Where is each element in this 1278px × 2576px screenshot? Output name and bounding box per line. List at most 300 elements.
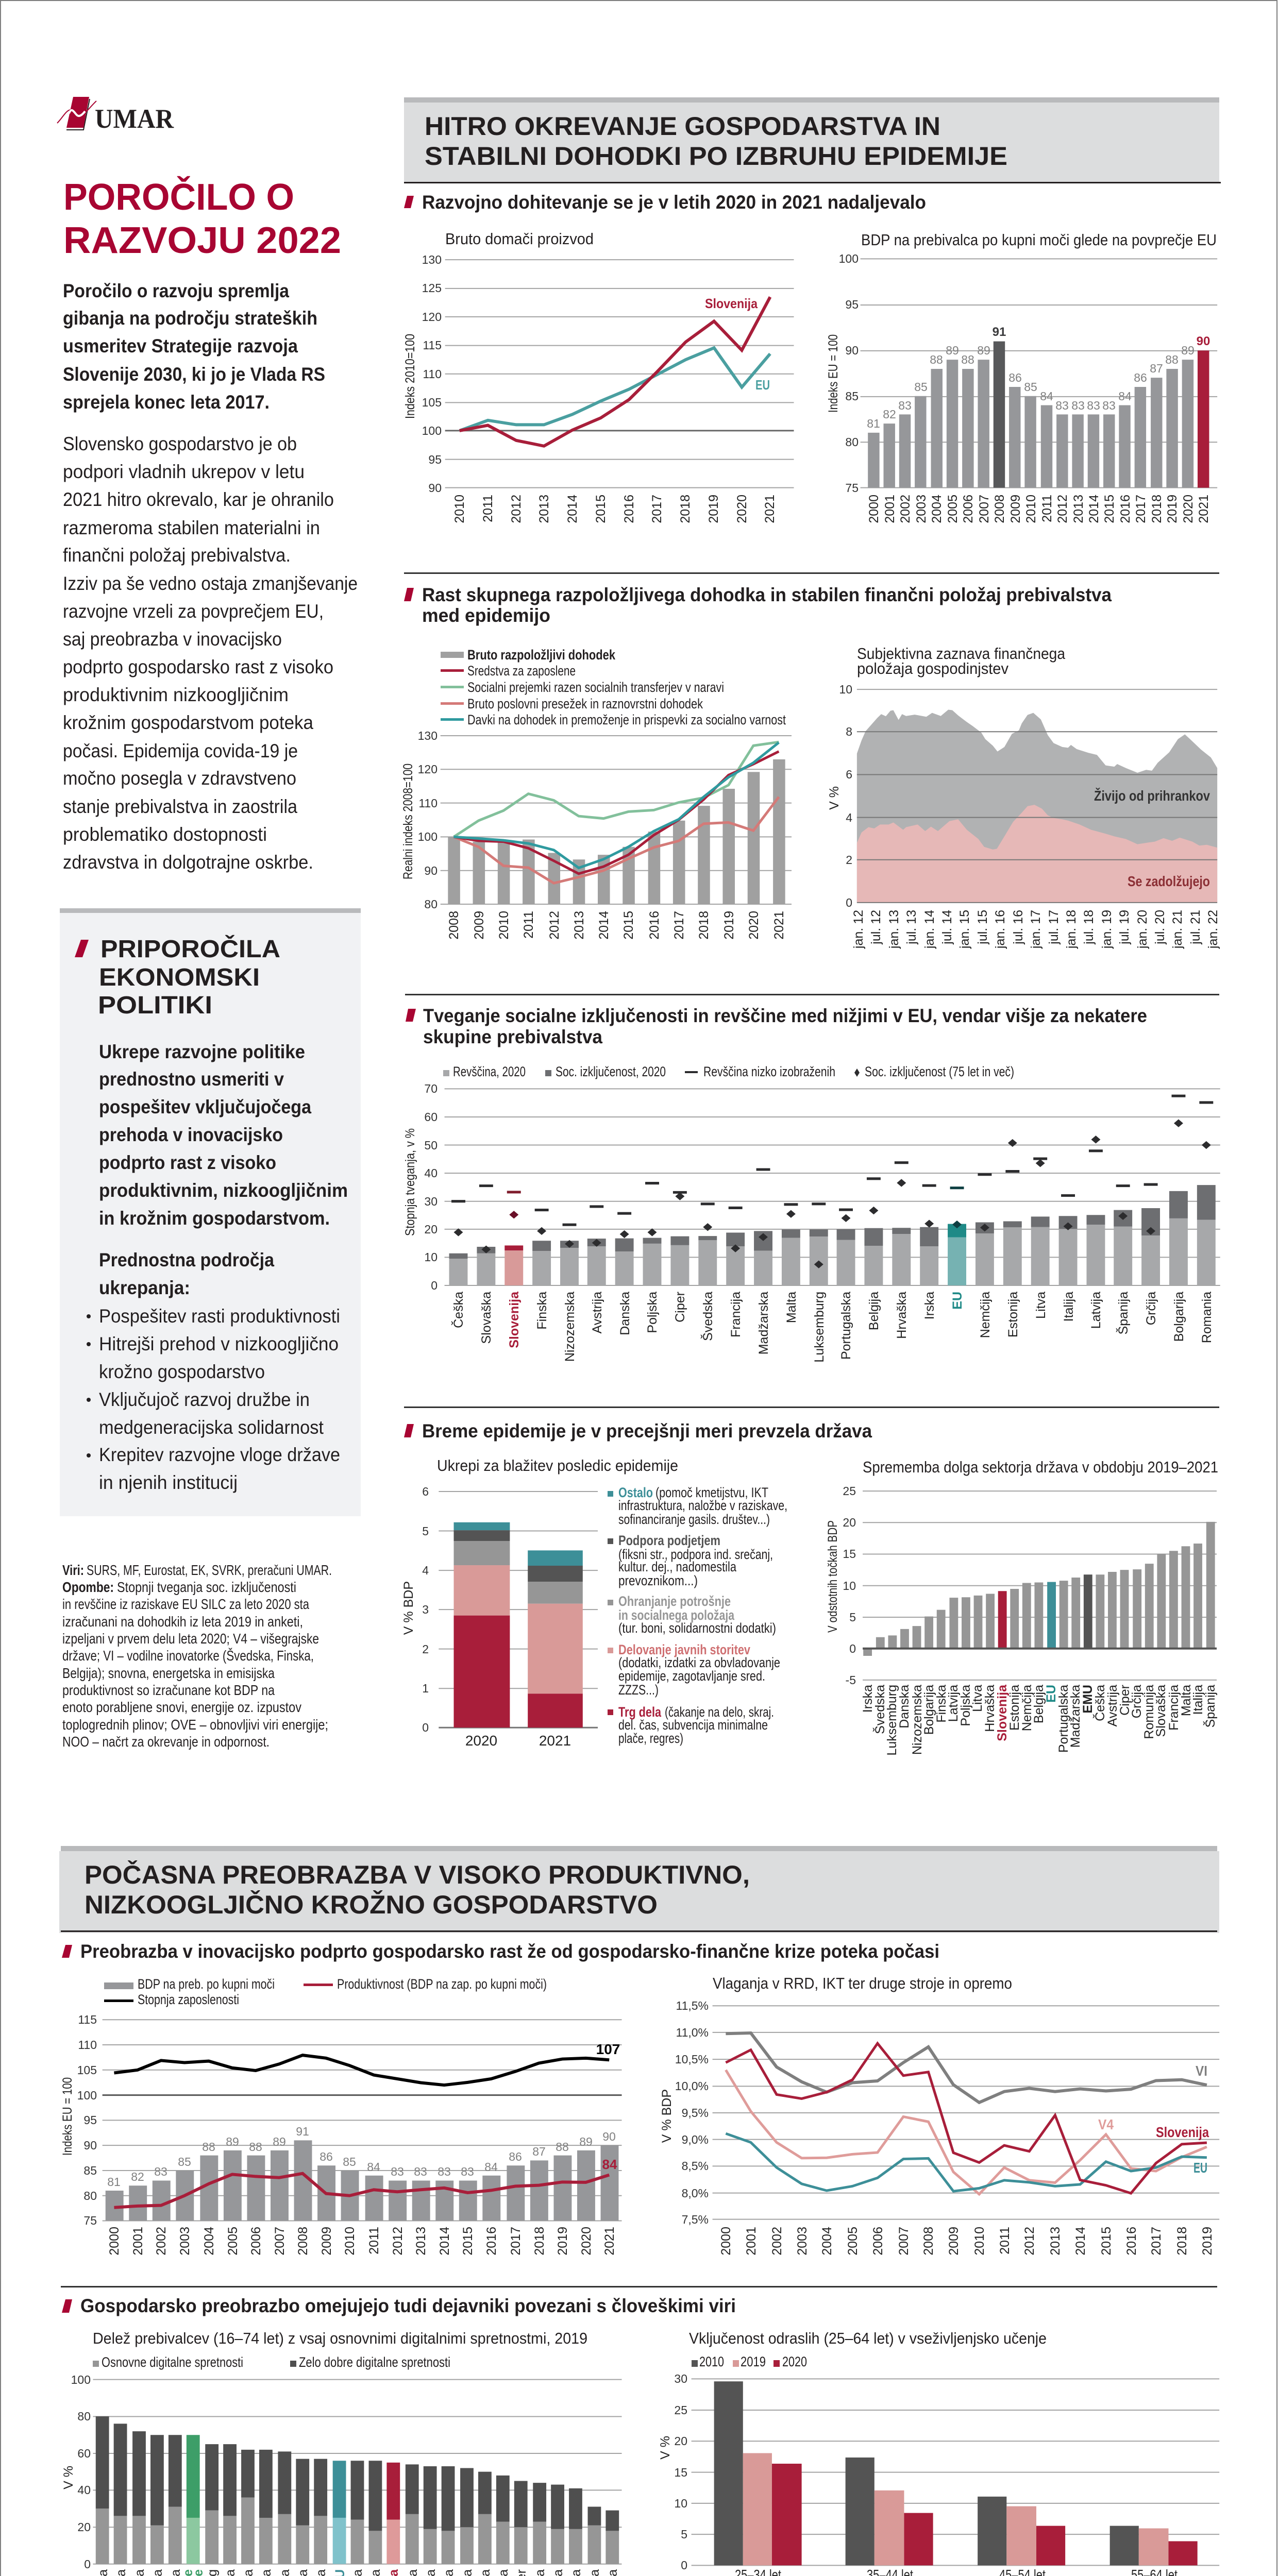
- legend: [692, 2354, 807, 2369]
- text block: sources and notes: produktivnost so izračunane kot BDP na: [62, 1682, 275, 1698]
- icon: heading marker: [75, 940, 89, 957]
- text block: body: finančni položaj prebivalstva.: [63, 545, 291, 566]
- chart: household income: 2019: [722, 911, 736, 940]
- chart: subjective financial position: jan. 20: [1135, 910, 1150, 949]
- chart: GDP line chart: 2018: [678, 495, 693, 523]
- chart: GDP, productivity and employment: 105: [77, 2063, 97, 2077]
- chart: change in government debt: Avstrija: [1105, 1685, 1120, 1727]
- text block: body: podprto gospodarsko rast z visoko: [63, 656, 333, 677]
- chart: GDP, productivity and employment: 88: [249, 2140, 262, 2154]
- chart: GDP per capita bars: 2019: [1165, 495, 1180, 523]
- chart: poverty and social exclusion: Avstrija: [590, 1292, 604, 1334]
- title: RAZVOJU 2022: [63, 220, 341, 261]
- title: [63, 176, 341, 261]
- panel: section header 1: STABILNI DOHODKI PO IZBRUHU EPIDEMIJE: [425, 142, 1007, 171]
- chart: poverty and social exclusion: Irska: [922, 1292, 937, 1319]
- text block: recommendation statement: produktivnim, nizkoogljičnim: [99, 1180, 348, 1201]
- chart: household income: 120: [418, 762, 438, 776]
- chart: investment in R&D, ICT and machinery: 2007: [897, 2227, 911, 2256]
- chart: GDP per capita bars: 83: [1087, 399, 1100, 412]
- chart: GDP per capita bars: [826, 231, 1217, 523]
- chart: subjective financial position: jul. 13: [904, 910, 919, 945]
- chart: investment in R&D, ICT and machinery: 2005: [846, 2227, 860, 2256]
- chart: GDP, productivity and employment: 110: [78, 2038, 97, 2052]
- panel: section header 2: NIZKOOGLJIČNO KROŽNO GOSPODARSTVO: [85, 1890, 658, 1919]
- chart: poverty and social exclusion: Malta: [784, 1292, 799, 1323]
- chart: subjective financial position: V %: [827, 786, 842, 810]
- chart: GDP line chart: 110: [423, 367, 442, 381]
- chart: change in government debt: Luksemburg: [885, 1685, 899, 1756]
- chart: change in government debt: 15: [843, 1547, 856, 1561]
- chart: GDP line chart: Bruto domači proizvod: [445, 230, 594, 248]
- chart: subjective financial position: 6: [846, 768, 852, 781]
- chart: poverty and social exclusion: 60: [424, 1110, 438, 1124]
- chart: GDP per capita bars: 85: [845, 389, 859, 403]
- chart: GDP per capita bars: 2015: [1102, 495, 1117, 523]
- chart: poverty and social exclusion: 40: [424, 1166, 438, 1180]
- chart: household income: 2014: [597, 911, 611, 940]
- chart: GDP, productivity and employment: 2014: [438, 2227, 452, 2256]
- chart: household income: 2012: [547, 911, 562, 940]
- chart: investment in R&D, ICT and machinery: Vlaganja v RRD, IKT ter druge stroje in opremo: [713, 1974, 1012, 1992]
- chart: change in government debt: Litva: [970, 1685, 985, 1712]
- chart: GDP line chart: 2016: [622, 495, 636, 523]
- chart: household income: 2013: [572, 911, 586, 940]
- chart: GDP, productivity and employment: 84: [602, 2157, 617, 2172]
- legend: measures: kultur. dej., nadomestila: [618, 1559, 737, 1574]
- icon: UMAR logo: UMAR: [95, 104, 174, 134]
- chart: GDP per capita bars: 91: [993, 325, 1006, 339]
- chart: investment in R&D, ICT and machinery: 10,5%: [675, 2053, 709, 2066]
- chart: household income: 2021: [772, 911, 786, 940]
- chart: GDP line chart: 130: [422, 253, 442, 266]
- chart: investment in R&D, ICT and machinery: 2018: [1175, 2227, 1189, 2256]
- chart: lifelong learning: 15: [674, 2466, 687, 2479]
- chart: GDP, productivity and employment: 87: [532, 2145, 546, 2158]
- heading: recommendations: EKONOMSKI: [99, 964, 260, 991]
- chart: GDP per capita bars: 2004: [930, 495, 944, 523]
- text block: body: zdravstva in dolgotrajne oskrbe.: [63, 852, 313, 873]
- heading: social exclusion: skupine prebivalstva: [423, 1026, 602, 1047]
- chart: digital skills: 0: [84, 2557, 91, 2571]
- chart: GDP line chart: Indeks 2010=100: [403, 334, 417, 419]
- chart: GDP line chart: 2019: [707, 495, 721, 523]
- text block: body: [63, 433, 358, 873]
- legend: measures: ZZZS...): [618, 1682, 659, 1698]
- text block: body: počasi. Epidemija covida-19 je: [63, 740, 298, 761]
- chart: GDP, productivity and employment: 90: [602, 2130, 616, 2143]
- chart: GDP, productivity and employment: 2016: [484, 2227, 499, 2256]
- chart: epidemic measures stacked bars: 4: [422, 1564, 429, 1577]
- chart: GDP per capita bars: 2006: [961, 495, 976, 523]
- chart: subjective financial position: jan. 16: [993, 910, 1007, 949]
- chart: household income: 2015: [621, 911, 636, 940]
- legend: Produktivnost (BDP na zap. po kupni moči): [337, 1976, 547, 1992]
- text block: sources and notes: enoto porabljene snovi, energije oz. izpustov: [62, 1699, 301, 1715]
- legend: 2019: [741, 2354, 766, 2369]
- chart: poverty and social exclusion: Latvija: [1089, 1292, 1103, 1329]
- chart: household income: 130: [418, 729, 438, 742]
- chart: GDP line chart: [403, 230, 794, 523]
- chart: lifelong learning: V %: [658, 2436, 672, 2460]
- chart: GDP, productivity and employment: 2015: [461, 2227, 475, 2256]
- heading: convergence: Razvojno dohitevanje se je v letih 2020 in 2021 nadaljevalo: [422, 192, 926, 213]
- heading: disposable income: med epidemijo: [422, 605, 550, 626]
- chart: GDP per capita bars: 83: [1071, 399, 1085, 412]
- text block: body: razvojne vrzeli za povprečjem EU,: [63, 601, 324, 622]
- legend: Osnovne digitalne spretnosti: [102, 2354, 243, 2370]
- text block: priority list: Vključujoč razvoj družbe in: [99, 1389, 310, 1410]
- chart: digital skills: 20: [77, 2520, 91, 2534]
- chart: subjective financial position: jan. 13: [887, 910, 901, 949]
- legend: 2020: [782, 2354, 807, 2369]
- chart: change in government debt: Slovenija: [995, 1684, 1010, 1741]
- text block: priority list: Hitrejši prehod v nizkoogljično: [99, 1333, 339, 1354]
- chart: GDP, productivity and employment: 2017: [509, 2227, 523, 2256]
- legend: measures: Ostalo: [618, 1485, 653, 1500]
- chart: digital skills: V %: [61, 2466, 76, 2489]
- chart: lifelong learning: [658, 2329, 1219, 2576]
- chart: GDP per capita bars: 88: [930, 353, 943, 366]
- chart: subjective financial position: 0: [846, 896, 852, 909]
- chart: subjective financial position: Živijo od prihrankov: [1094, 788, 1210, 804]
- chart: GDP per capita bars: 75: [845, 481, 859, 495]
- chart: poverty and social exclusion: Danska: [618, 1292, 632, 1335]
- chart: GDP line chart: 2012: [509, 495, 524, 523]
- chart: change in government debt: V odstotnih točkah BDP: [826, 1520, 840, 1633]
- legend: Davki na dohodek in premoženje in prispevki za socialno varnost: [467, 712, 786, 727]
- chart: epidemic measures stacked bars: V % BDP: [401, 1581, 416, 1635]
- chart: GDP line chart: EU: [755, 377, 770, 393]
- text block: priority list: in njenih institucij: [99, 1472, 238, 1493]
- chart: change in government debt: Sprememba dolga sektorja država v obdobju 2019–2021: [863, 1458, 1218, 1476]
- chart: GDP line chart: 100: [422, 424, 442, 437]
- legend: measures: (fiksni str., podpora ind. srečanj,: [618, 1547, 773, 1562]
- chart: investment in R&D, ICT and machinery: 2002: [770, 2227, 784, 2256]
- chart: subjective financial position: Subjektivna zaznava finančnega: [857, 645, 1066, 663]
- legend: Soc. izključenost (75 let in več): [865, 1064, 1014, 1079]
- chart: investment in R&D, ICT and machinery: 2009: [947, 2227, 961, 2256]
- chart: poverty and social exclusion: Bolgarija: [1172, 1292, 1186, 1342]
- chart: GDP, productivity and employment: Indeks EU = 100: [60, 2077, 75, 2156]
- chart: poverty and social exclusion: Hrvaška: [895, 1292, 909, 1339]
- chart: change in government debt: 10: [843, 1579, 856, 1592]
- chart: GDP, productivity and employment: 85: [83, 2164, 97, 2177]
- chart: poverty and social exclusion: Estonija: [1006, 1292, 1020, 1337]
- chart: investment in R&D, ICT and machinery: 9,0%: [682, 2133, 709, 2146]
- text block: recommendation statement: ukrepanja:: [99, 1277, 190, 1298]
- chart: subjective financial position: jan. 22: [1206, 910, 1220, 949]
- chart: GDP per capita bars: 2013: [1071, 495, 1086, 523]
- chart: investment in R&D, ICT and machinery: 2019: [1200, 2227, 1215, 2256]
- chart: investment in R&D, ICT and machinery: VI: [1196, 2063, 1207, 2079]
- chart: change in government debt: 20: [843, 1516, 856, 1529]
- legend: Zelo dobre digitalne spretnosti: [299, 2354, 450, 2370]
- text block: body: saj preobrazba v inovacijsko: [63, 629, 282, 650]
- chart: household income: 90: [424, 864, 438, 877]
- chart: GDP per capita bars: 83: [898, 399, 912, 412]
- chart: GDP per capita bars: 2010: [1024, 495, 1038, 523]
- chart: GDP line chart: 115: [423, 338, 442, 352]
- chart: epidemic measures stacked bars: 2020: [465, 1733, 497, 1749]
- heading: innovation-led transformation: Preobrazba v inovacijsko podprto gospodarsko rast že od gospodarsko-finančne krize poteka počasi: [80, 1941, 939, 1962]
- chart: GDP per capita bars: 88: [961, 353, 974, 366]
- chart: GDP per capita bars: 2000: [867, 495, 881, 523]
- legend: Revščina nizko izobraženih: [703, 1064, 835, 1079]
- chart: GDP, productivity and employment: 2000: [107, 2227, 122, 2256]
- chart: investment in R&D, ICT and machinery: 2010: [972, 2227, 987, 2256]
- chart: subjective financial position: jan. 21: [1170, 910, 1185, 949]
- chart: GDP, productivity and employment: 86: [509, 2150, 522, 2163]
- chart: GDP, productivity and employment: 89: [579, 2135, 593, 2148]
- text block: priority list: krožno gospodarstvo: [99, 1361, 265, 1382]
- chart: investment in R&D, ICT and machinery: 7,5%: [682, 2213, 709, 2226]
- chart: household income: 2016: [647, 911, 662, 940]
- chart: GDP per capita bars: 87: [1150, 362, 1163, 375]
- chart: household income: 2009: [472, 911, 486, 940]
- legend: measures: (čakanje na delo, skraj.: [665, 1704, 774, 1720]
- legend: measures: Delovanje javnih storitev: [618, 1642, 750, 1657]
- chart: poverty and social exclusion: Češka: [451, 1292, 466, 1328]
- legend: measures: (tur. boni, solidarnostni dodatki): [618, 1620, 776, 1636]
- chart: GDP per capita bars: 2014: [1087, 495, 1101, 523]
- chart: subjective financial position: jan. 14: [922, 910, 937, 949]
- legend: measures: infrastruktura, naložbe v raziskave,: [618, 1498, 787, 1513]
- chart: change in government debt: Hrvaška: [983, 1685, 997, 1732]
- chart: GDP, productivity and employment: [60, 1976, 622, 2256]
- chart: change in government debt: Nizozemska: [910, 1685, 924, 1755]
- legend: 2010: [699, 2354, 724, 2369]
- chart: GDP line chart: 2010: [452, 495, 467, 523]
- chart: digital skills: [61, 2329, 622, 2576]
- chart: GDP line chart: 2020: [735, 495, 749, 523]
- chart: epidemic measures stacked bars: 5: [422, 1524, 429, 1538]
- text block: recommendation statement: in krožnim gospodarstvom.: [99, 1208, 330, 1229]
- chart: GDP, productivity and employment: 2008: [296, 2227, 310, 2256]
- text block: intro: Slovenije 2030, ki jo je Vlada RS: [63, 364, 325, 385]
- chart: digital skills: 80: [77, 2410, 91, 2423]
- chart: GDP, productivity and employment: 115: [78, 2013, 97, 2026]
- chart: GDP, productivity and employment: 2007: [273, 2227, 287, 2256]
- chart: change in government debt: Nemčija: [1020, 1685, 1034, 1731]
- chart: household income: 2018: [697, 911, 711, 940]
- chart: GDP per capita bars: 86: [1008, 371, 1022, 384]
- chart: change in government debt: Malta: [1179, 1685, 1193, 1716]
- chart: investment in R&D, ICT and machinery: 2000: [719, 2227, 733, 2256]
- chart: subjective financial position: [827, 645, 1220, 949]
- chart: poverty and social exclusion: Španija: [1116, 1292, 1131, 1334]
- chart: change in government debt: Romunija: [1142, 1685, 1156, 1739]
- legend: measures: [608, 1485, 787, 1746]
- chart: GDP per capita bars: 85: [914, 380, 928, 394]
- chart: change in government debt: 25: [843, 1484, 856, 1498]
- chart: poverty and social exclusion: Poljska: [645, 1292, 660, 1333]
- chart: poverty and social exclusion: Stopnja tveganja, v %: [403, 1128, 417, 1236]
- chart: GDP per capita bars: 85: [1024, 380, 1037, 394]
- chart: GDP, productivity and employment: 100: [77, 2089, 97, 2102]
- chart: GDP line chart: 2021: [763, 495, 777, 523]
- chart: change in government debt: Italija: [1191, 1685, 1205, 1715]
- chart: change in government debt: Irska: [861, 1685, 875, 1713]
- text block: sources and notes: države; VI – vodilne inovatorke (Švedska, Finska,: [62, 1648, 314, 1664]
- text block: recommendation statement: pospešitev vključujočega: [99, 1096, 311, 1117]
- text block: sources and notes: toplogrednih plinov; OVE – obnovljivi viri energije;: [62, 1717, 328, 1733]
- heading: human resources: Gospodarsko preobrazbo omejujejo tudi dejavniki povezani s človeškimi viri: [80, 2295, 736, 2316]
- legend: BDP na preb. po kupni moči: [138, 1976, 275, 1992]
- text block: sources and notes: in revščine iz raziskave EU SILC za leto 2020 sta: [62, 1596, 309, 1612]
- chart: change in government debt: Latvija: [946, 1685, 961, 1722]
- chart: poverty and social exclusion: Romania: [1200, 1292, 1214, 1343]
- chart: GDP line chart: 105: [422, 396, 442, 409]
- chart: GDP, productivity and employment: 81: [107, 2175, 121, 2189]
- chart: poverty and social exclusion: Nemčija: [978, 1292, 993, 1338]
- chart: investment in R&D, ICT and machinery: 2012: [1022, 2227, 1037, 2256]
- chart: investment in R&D, ICT and machinery: 2011: [998, 2227, 1012, 2255]
- legend: Revščina, 2020: [453, 1064, 526, 1079]
- heading: disposable income: Rast skupnega razpoložljivega dohodka in stabilen finančni položaj prebivalstva: [422, 584, 1112, 605]
- text block: intro: gibanja na področju strateških: [63, 308, 317, 329]
- chart: GDP, productivity and employment: 107: [596, 2041, 620, 2057]
- legend: Bruto razpoložljivi dohodek: [467, 647, 616, 663]
- chart: GDP per capita bars: 2012: [1055, 495, 1070, 523]
- chart: subjective financial position: jul. 12: [869, 910, 883, 945]
- chart: GDP per capita bars: 2003: [914, 495, 929, 523]
- chart: GDP, productivity and employment: 2004: [202, 2227, 216, 2256]
- chart: GDP, productivity and employment: 2009: [320, 2227, 334, 2256]
- legend: measures: in socialnega položaja: [618, 1607, 735, 1623]
- text block: priority list: [87, 1306, 340, 1493]
- text block: sources and notes: NOO – načrt za okrevanje in odpornost.: [62, 1734, 270, 1750]
- chart: change in government debt: Finska: [934, 1685, 949, 1723]
- chart: GDP, productivity and employment: 2012: [391, 2227, 405, 2256]
- chart: poverty and social exclusion: Belgija: [867, 1292, 881, 1330]
- chart: GDP per capita bars: 2005: [946, 495, 960, 523]
- legend: measures: Ohranjanje potrošnje: [618, 1594, 731, 1609]
- legend: [93, 2354, 450, 2370]
- text block: body: močno posegla v zdravstveno: [63, 768, 296, 789]
- chart: GDP, productivity and employment: 80: [83, 2189, 97, 2202]
- legend: measures: plače, regres): [618, 1731, 683, 1746]
- chart: GDP per capita bars: 86: [1134, 371, 1147, 384]
- chart: change in government debt: Švedska: [872, 1685, 887, 1734]
- chart: investment in R&D, ICT and machinery: 10,0%: [675, 2079, 709, 2093]
- chart: investment in R&D, ICT and machinery: 2008: [921, 2227, 936, 2256]
- chart: GDP line chart: 2017: [650, 495, 664, 523]
- chart: GDP per capita bars: 95: [845, 298, 859, 311]
- text block: body: razmeroma stabilen materialni in: [63, 517, 320, 538]
- text block: recommendation statement: prednostno usmeriti v: [99, 1069, 284, 1090]
- chart: GDP, productivity and employment: 2010: [343, 2227, 357, 2256]
- chart: GDP per capita bars: 2007: [977, 495, 991, 523]
- chart: GDP, productivity and employment: 2013: [414, 2227, 428, 2256]
- chart: GDP per capita bars: 90: [1197, 334, 1210, 348]
- chart: household income: 110: [418, 796, 438, 810]
- text block: sources and notes: Opombe:: [62, 1579, 114, 1595]
- chart: poverty and social exclusion: 0: [431, 1279, 438, 1292]
- chart: household income: 2008: [447, 911, 461, 940]
- chart: GDP, productivity and employment: 83: [461, 2165, 474, 2178]
- chart: change in government debt: Estonija: [1007, 1685, 1022, 1731]
- chart: GDP, productivity and employment: 2005: [226, 2227, 240, 2256]
- chart: epidemic measures stacked bars: 1: [422, 1682, 429, 1695]
- chart: subjective financial position: jan. 19: [1100, 910, 1114, 949]
- chart: GDP per capita bars: Indeks EU = 100: [826, 334, 840, 413]
- chart: subjective financial position: Se zadolžujejo: [1128, 873, 1210, 889]
- chart: poverty and social exclusion: Luksemburg: [812, 1292, 827, 1363]
- chart: GDP per capita bars: 2011: [1040, 495, 1054, 522]
- text block: sources and notes: Viri:: [62, 1562, 84, 1578]
- chart: poverty and social exclusion: 30: [424, 1195, 438, 1208]
- chart: poverty and social exclusion: 20: [424, 1223, 438, 1236]
- chart: subjective financial position: 2: [846, 853, 852, 867]
- chart: GDP, productivity and employment: 83: [154, 2165, 167, 2178]
- text block: priority list: Pospešitev rasti produktivnosti: [99, 1306, 340, 1327]
- chart: change in government debt: 0: [849, 1642, 856, 1655]
- text block: body: Slovensko gospodarstvo je ob: [63, 433, 297, 454]
- chart: investment in R&D, ICT and machinery: 11,5%: [676, 1999, 709, 2012]
- chart: GDP line chart: 2015: [594, 495, 608, 523]
- chart: poverty and social exclusion: Portugalska: [839, 1292, 853, 1360]
- chart: GDP per capita bars: 2001: [883, 495, 897, 523]
- chart: GDP line chart: 125: [422, 281, 442, 295]
- chart: investment in R&D, ICT and machinery: 2017: [1149, 2227, 1164, 2256]
- legend: measures: sofinanciranje gasils. društev...): [618, 1512, 770, 1527]
- chart: poverty and social exclusion: [403, 1064, 1220, 1363]
- chart: subjective financial position: jul. 18: [1082, 910, 1096, 945]
- panel: recommendations for economic policy: [60, 908, 361, 1516]
- chart: GDP, productivity and employment: 88: [556, 2140, 569, 2154]
- panel: section header 1: [404, 97, 1221, 183]
- chart: subjective financial position: jul. 14: [940, 910, 954, 945]
- chart: GDP line chart: 2013: [537, 495, 551, 523]
- chart: GDP line chart: 2011: [481, 495, 495, 522]
- chart: GDP, productivity and employment: 2003: [178, 2227, 192, 2256]
- chart: change in government debt: EU: [1044, 1685, 1058, 1703]
- chart: GDP per capita bars: 2021: [1197, 495, 1211, 523]
- chart: GDP, productivity and employment: 84: [484, 2160, 498, 2174]
- text block: recommendation statement: [99, 1041, 348, 1298]
- legend: measures: epidemije, zagotavljanje sred.: [618, 1668, 765, 1684]
- chart: household income: 2020: [747, 911, 761, 940]
- chart: poverty and social exclusion: Finska: [535, 1292, 549, 1330]
- chart: GDP per capita bars: 2016: [1118, 495, 1133, 523]
- chart: change in government debt: Poljska: [959, 1685, 973, 1726]
- chart: change in government debt: 5: [849, 1611, 856, 1624]
- chart: GDP, productivity and employment: 83: [391, 2165, 404, 2178]
- chart: lifelong learning: Vključenost odraslih (25–64 let) v vseživljenjsko učenje: [689, 2329, 1047, 2347]
- text block: sources and notes: izračunani na dohodkih iz leta 2019 in anketi,: [62, 1614, 303, 1630]
- chart: GDP, productivity and employment: 84: [367, 2160, 380, 2174]
- chart: GDP, productivity and employment: 95: [83, 2113, 97, 2127]
- heading: social exclusion: Tveganje socialne izključenosti in revščine med nižjimi v EU, vendar višje za nekatere: [423, 1005, 1147, 1026]
- text block: sources and notes: Belgija); snovna, energetska in emisijska: [62, 1665, 275, 1681]
- chart: GDP, productivity and employment: 82: [131, 2170, 144, 2183]
- text block: body: krožnim gospodarstvom poteka: [63, 712, 313, 733]
- chart: GDP, productivity and employment: 89: [226, 2135, 239, 2148]
- chart: poverty and social exclusion: EU: [950, 1292, 965, 1310]
- chart: GDP, productivity and employment: 83: [438, 2165, 451, 2178]
- text block: intro: [63, 280, 325, 413]
- chart: poverty and social exclusion: 10: [424, 1250, 438, 1264]
- chart: poverty and social exclusion: Italija: [1062, 1292, 1076, 1321]
- chart: epidemic measures stacked bars: 0: [422, 1721, 429, 1734]
- chart: poverty and social exclusion: Nizozemska: [563, 1292, 577, 1362]
- text block: sources and notes: Stopnji tveganja soc. izključenosti: [117, 1579, 296, 1595]
- chart: GDP, productivity and employment: 2021: [602, 2227, 617, 2256]
- chart: GDP line chart: 120: [422, 310, 442, 324]
- chart: GDP, productivity and employment: 2018: [532, 2227, 547, 2256]
- chart: GDP, productivity and employment: 2011: [367, 2227, 381, 2255]
